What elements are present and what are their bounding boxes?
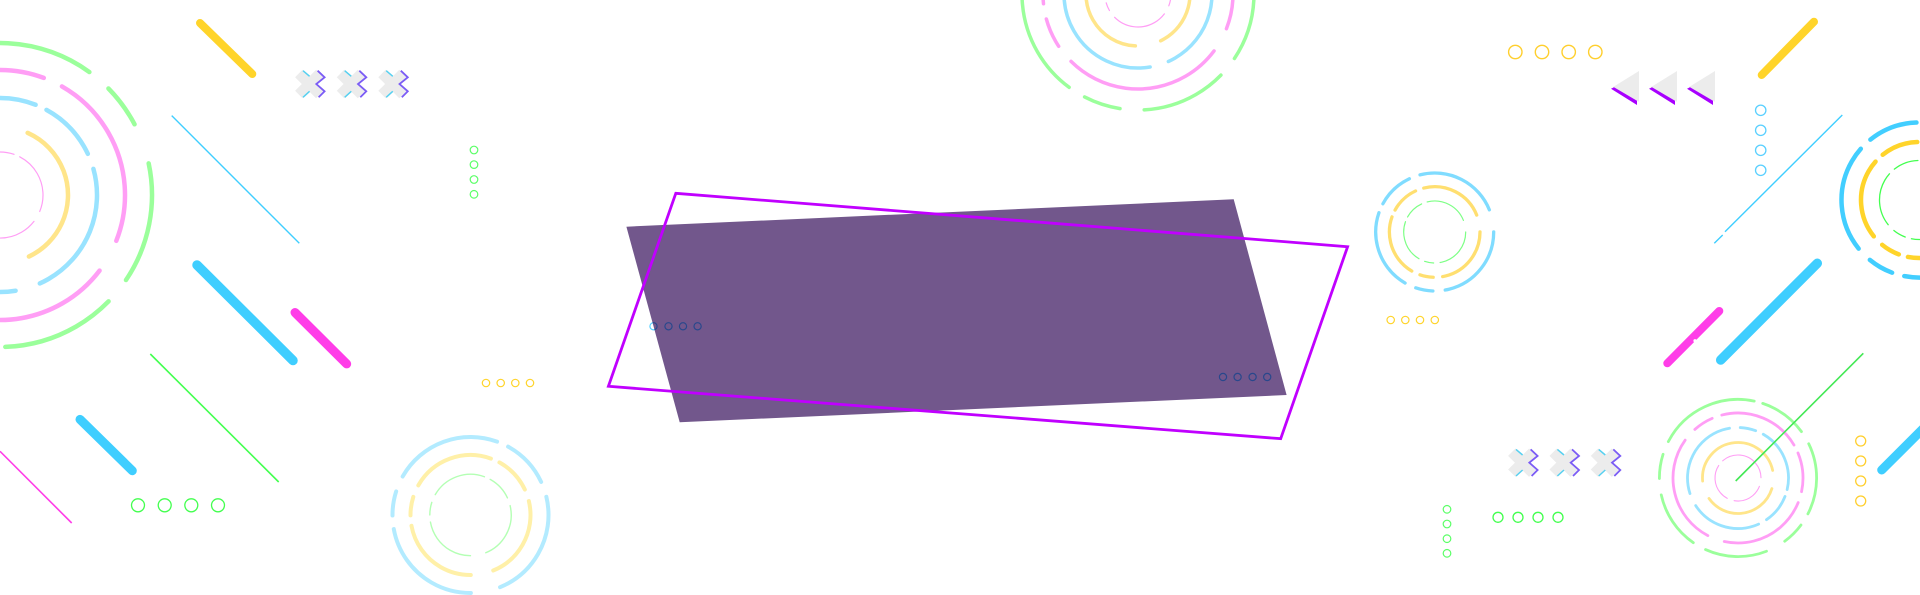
concentric rings: bottom left — [364, 408, 577, 595]
dot row: yellow, under middle right rings — [1387, 316, 1439, 324]
concentric rings: left edge — [0, 0, 208, 403]
icon: crosses, top left — [299, 71, 408, 97]
central frame: violet outline — [608, 193, 1348, 439]
dot row: green, bottom left — [132, 499, 224, 512]
central panel: purple parallelogram — [626, 199, 1287, 422]
dot column: blue, upper right — [1756, 105, 1766, 176]
dot column: green, upper left — [470, 146, 478, 198]
right cluster of diagonal bars and lines — [1667, 22, 1920, 481]
left cluster of diagonal bars and lines — [0, 23, 347, 523]
icon: triangles, top right — [1611, 71, 1715, 105]
concentric rings: right edge — [1813, 94, 1920, 306]
concentric rings: bottom right — [1632, 372, 1844, 584]
concentric rings: middle right — [1363, 160, 1506, 304]
dot row on panel: right — [1219, 373, 1271, 381]
dot row: green, bottom right — [1493, 512, 1563, 522]
concentric rings: top centre — [980, 0, 1296, 152]
dot column: green, bottom right — [1443, 506, 1451, 557]
icon: crosses, bottom right — [1512, 449, 1620, 476]
dot row: yellow, lower left — [482, 379, 534, 387]
dot column: yellow, far right — [1856, 436, 1866, 506]
dot row on panel: left — [650, 323, 701, 330]
dot row: yellow, top right — [1509, 45, 1602, 59]
